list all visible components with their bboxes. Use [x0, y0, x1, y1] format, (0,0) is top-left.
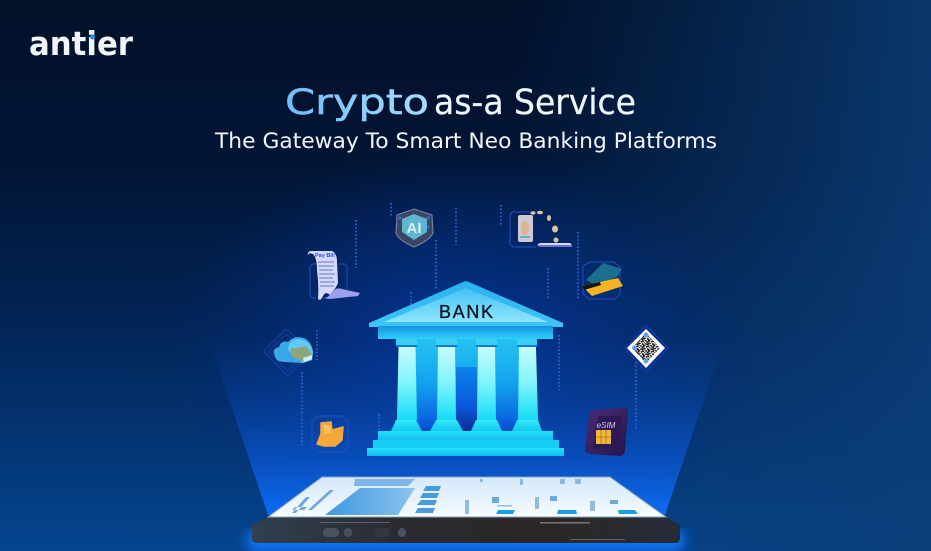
roof — [369, 281, 563, 327]
phone screen — [268, 477, 666, 517]
icon: mobile with coins — [510, 211, 572, 247]
icon: AI shield: AI — [406, 220, 422, 237]
icon: gold coins — [312, 416, 348, 452]
phone — [252, 477, 680, 543]
screen action buttons — [496, 510, 638, 514]
title: as-a Service — [434, 83, 636, 123]
icon: eSIM: eSIM — [597, 421, 616, 430]
entablature — [378, 326, 553, 339]
subtitle: The Gateway To Smart Neo Banking Platforms — [214, 129, 717, 153]
icon: AI shield — [396, 209, 433, 247]
columns — [391, 339, 542, 431]
phone glow — [248, 530, 684, 551]
icon: eSIM — [585, 408, 628, 456]
icon: QR code — [625, 325, 668, 372]
bank label: BANK — [439, 302, 493, 322]
logo: antier: antier — [29, 24, 134, 63]
screen side widgets — [415, 486, 441, 513]
bank building — [367, 281, 564, 456]
icon: bank cards — [582, 262, 623, 299]
screen header text — [292, 490, 334, 513]
icon: cloud storage — [264, 329, 313, 376]
icon: pay bill receipt: Pay Bill — [315, 253, 335, 259]
title — [285, 83, 636, 123]
screen balance card — [325, 488, 415, 515]
light beam from phone — [209, 340, 724, 515]
title: Crypto — [285, 83, 429, 123]
camera lenses — [323, 528, 406, 537]
back wall — [404, 338, 530, 432]
icon: pay bill receipt — [308, 251, 360, 300]
steps — [378, 431, 553, 440]
data streams — [302, 203, 636, 455]
phone body — [252, 517, 680, 543]
